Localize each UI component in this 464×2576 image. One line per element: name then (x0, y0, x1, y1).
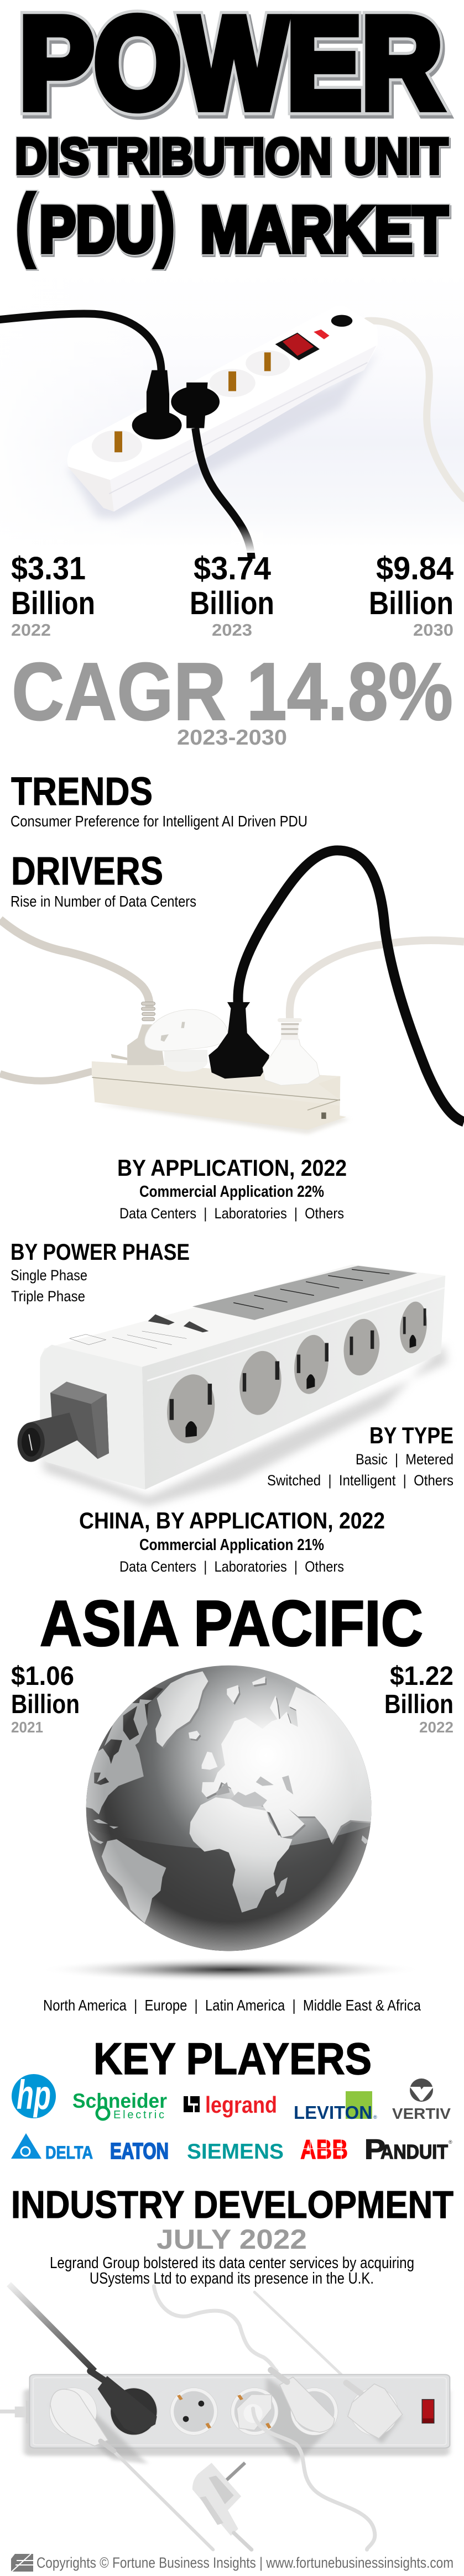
black cord 2 (195, 428, 252, 559)
market size stat: 2023: 2023 (212, 620, 252, 640)
south-east Asia shoreline (362, 1835, 368, 1844)
regional stat: 2022 (384, 1662, 453, 1736)
globe (83, 1666, 377, 1957)
plug cast shadows (50, 2377, 403, 2464)
regional stat: 2021: 2021 (11, 1719, 43, 1736)
Greenland (155, 1671, 208, 1747)
Central America and Caribbean (88, 1819, 118, 1844)
title line: (PDU) MARKET: ( (17, 180, 36, 270)
sockets (246, 350, 290, 376)
drivers heading: DRIVERS (11, 850, 163, 893)
title line: (PDU) MARKET: PDU (39, 193, 155, 266)
drivers text: Rise in Number of Data Centers (11, 893, 196, 910)
logo: Schneider Electric (72, 2090, 167, 2121)
trends heading: TRENDS (11, 770, 153, 814)
strip body (30, 2375, 450, 2448)
Africa and Arabia (190, 1797, 293, 1913)
Madagascar (275, 1877, 288, 1897)
top plate (192, 1266, 417, 1320)
South America (102, 1839, 166, 1923)
logo: Panduit: ® (449, 2139, 452, 2145)
key players heading: KEY PLAYERS (93, 2034, 372, 2084)
logo: legrand (184, 2092, 277, 2118)
market size stat: 2030: Billion (369, 585, 453, 621)
power button (331, 315, 352, 327)
title line: (PDU) MARKET: ( (15, 178, 35, 268)
logo: HP: hp (17, 2072, 51, 2118)
by power phase block: Triple Phase (11, 1288, 85, 1305)
top switches (148, 1315, 208, 1332)
by power phase block: Single Phase (11, 1267, 87, 1284)
China share: Commercial Application 21% (139, 1536, 324, 1554)
logo: Leviton: LEVITON (294, 2102, 372, 2123)
title line: (PDU) MARKET: ) (155, 180, 176, 270)
by application heading: BY APPLICATION, 2022 (117, 1155, 347, 1181)
image: white power strip with black plugs (0, 271, 464, 559)
market size stat: 2023: Billion (190, 585, 274, 621)
North American waters and Canada (108, 1687, 164, 1742)
top label markings (70, 1331, 186, 1348)
Iceland and Arctic islands (189, 1677, 265, 1769)
title line: (PDU) MARKET: PDU (39, 193, 155, 266)
regional stat: 2021: Billion (11, 1690, 80, 1719)
regional stat: 2022: 2022 (419, 1719, 453, 1736)
square plug (346, 2383, 403, 2438)
footer (11, 2554, 453, 2572)
title line: (PDU) MARKET: ) (154, 178, 175, 268)
market size stat: 2030: $9.84 (376, 551, 453, 587)
white cord (290, 940, 464, 1020)
grey plug (111, 1002, 164, 1065)
CAGR period: 2023-2030 (177, 726, 287, 750)
logo: Siemens: SIEMENS (187, 2140, 284, 2164)
logo: Panduit: ANDUIT (380, 2140, 448, 2163)
logo: Delta: DELTA (45, 2143, 93, 2163)
development text: USystems Ltd to expand its presence in the U.K. (90, 2270, 374, 2287)
market size stat: 2022: Billion (11, 585, 95, 621)
trends text: Consumer Preference for Intelligent AI Driven PDU (11, 813, 307, 830)
title line: (PDU) MARKET: ) (154, 178, 175, 268)
regional stat: 2022: $1.22 (390, 1662, 453, 1691)
centre plug and cord (237, 2394, 375, 2549)
strip shadow (24, 2389, 450, 2456)
strip body (67, 306, 378, 511)
land shadows (157, 1673, 377, 1845)
black cord 1 (0, 313, 161, 373)
PDU body (40, 1264, 445, 1490)
black plugs (132, 370, 220, 439)
market size stat: 2030 (369, 551, 453, 640)
lower dark band (83, 1824, 376, 1957)
market size stat: 2022: 2022 (11, 620, 51, 640)
left white plug (50, 2389, 213, 2549)
title line: (PDU) MARKET (15, 178, 449, 270)
PDU shadow (41, 1343, 447, 1506)
strip cords behind (0, 2286, 352, 2423)
logo: Delta (11, 2133, 93, 2163)
image: beige power strip with cords (0, 850, 464, 1134)
by power phase block: BY POWER PHASE (11, 1239, 190, 1265)
round white plug (145, 1009, 228, 1072)
plate slots (234, 1269, 389, 1309)
outlets (164, 1301, 429, 1445)
sockets (49, 2388, 398, 2435)
market size stat: 2023: $3.74 (194, 551, 271, 587)
logo: Panduit: P (364, 2134, 385, 2165)
logo: Leviton (294, 2091, 377, 2123)
market size stat: 2022: $3.31 (11, 551, 86, 587)
logo: Leviton: ® (373, 2114, 377, 2120)
logo: legrand: legrand (205, 2092, 277, 2118)
globe ground shadow (40, 1957, 421, 1982)
logo: Schneider Electric: Schneider (72, 2090, 167, 2112)
footer logo (11, 2554, 33, 2572)
black plug and cord (9, 2284, 157, 2435)
logo: ABB: ABB (300, 2135, 348, 2165)
by type block (267, 1422, 453, 1489)
black cord (238, 850, 464, 1122)
Eurasia (202, 1687, 376, 1843)
China categories: Data Centers | Laboratories | Others (119, 1558, 344, 1575)
logo: Vertiv (392, 2078, 451, 2122)
black plug (208, 1002, 269, 1078)
market size stat: 2030: 2030 (413, 620, 453, 640)
inland seas (231, 1792, 267, 1807)
logo: Panduit (364, 2134, 452, 2165)
title line: (PDU) MARKET: ( (15, 178, 35, 268)
power connector (18, 1382, 109, 1462)
by power phase block (11, 1239, 190, 1305)
left grey cords (0, 919, 149, 1008)
image: white PDU strip with outlets (18, 1264, 447, 1506)
logo: Eaton: EATON (110, 2138, 169, 2164)
development date: JULY 2022 (157, 2224, 307, 2255)
strip shadow (68, 350, 379, 518)
logos: key players (11, 2072, 452, 2165)
by application categories: Data Centers | Laboratories | Others (119, 1205, 344, 1222)
regional stat: 2021: $1.06 (11, 1662, 74, 1691)
title line: (PDU) MARKET: PDU (40, 195, 156, 268)
logo: Schneider Electric: Electric (113, 2109, 164, 2121)
development text (50, 2254, 414, 2287)
right white plug (271, 2370, 335, 2432)
white cord (367, 321, 464, 499)
regional stat: 2022: Billion (384, 1690, 453, 1719)
switch and indicator (275, 333, 320, 360)
market size stat: 2023 (190, 551, 274, 640)
red switch (422, 2399, 435, 2423)
strip body (92, 1061, 349, 1134)
loose plug (192, 2463, 252, 2549)
white plug (263, 1018, 320, 1085)
image: grey six-socket power strip with plugs (0, 2284, 450, 2549)
by application share: Commercial Application 22% (139, 1183, 324, 1201)
Asia Pacific heading: ASIA PACIFIC (40, 1587, 423, 1659)
title (15, 0, 449, 270)
regional stat: 2021 (11, 1662, 80, 1736)
China by application heading: CHINA, BY APPLICATION, 2022 (79, 1507, 385, 1533)
market size stat: 2022 (11, 551, 95, 640)
logo: Vertiv: VERTIV (392, 2105, 451, 2122)
